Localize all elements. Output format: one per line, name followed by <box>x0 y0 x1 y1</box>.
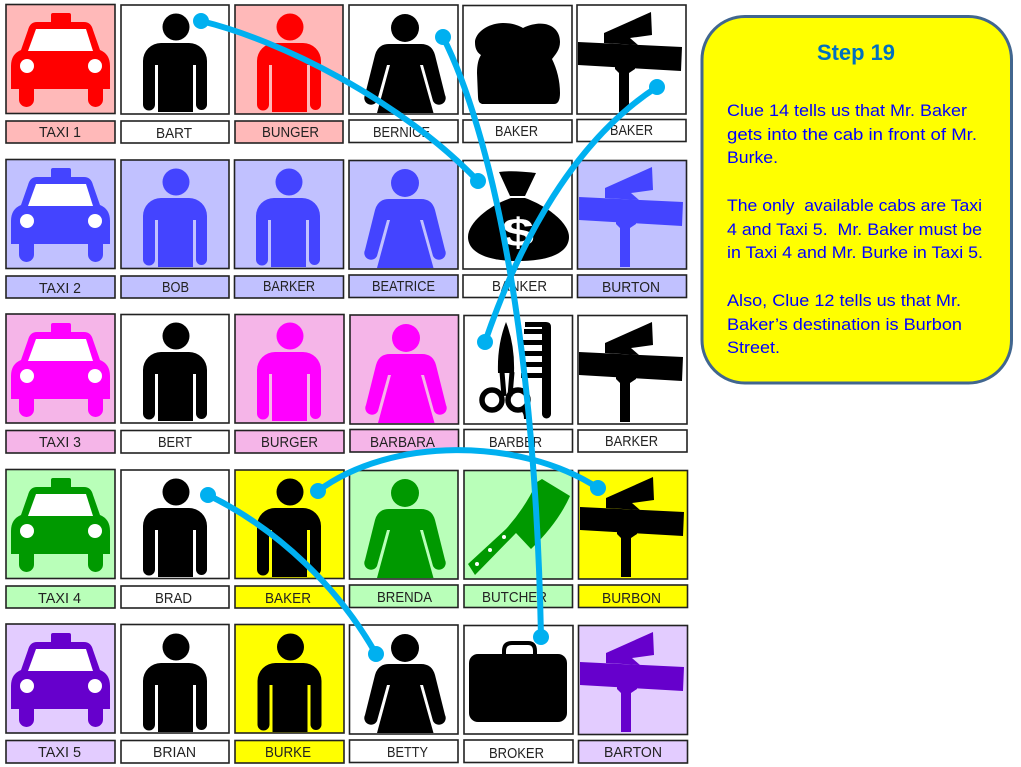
label: BURBON: BURBON <box>602 590 661 607</box>
heading: Step 19 <box>817 40 895 65</box>
text block: clue 14: Burke. <box>727 149 778 167</box>
label: TAXI 2 <box>6 276 115 298</box>
icon: Barbara <box>350 315 458 424</box>
row 4: Taxi 4 icon <box>6 470 115 578</box>
connector: Bart to banker <box>193 13 486 189</box>
label: BAKER <box>463 120 572 142</box>
connector lines <box>193 13 665 662</box>
connector: Baker passenger to Burbon street <box>310 450 606 499</box>
label: BUTCHER: BUTCHER <box>482 589 547 606</box>
label: BRAD: BRAD <box>155 590 192 607</box>
label: BARBARA: BARBARA <box>370 434 435 451</box>
icon: Brad <box>121 470 229 578</box>
label: BART <box>121 121 229 143</box>
label: BAKER passenger: BAKER <box>265 590 311 607</box>
label: BURGER: BURGER <box>261 434 318 451</box>
label: TAXI 1: TAXI 1 <box>39 124 81 141</box>
label: TAXI 3 <box>6 430 115 453</box>
label: BEATRICE: BEATRICE <box>372 278 435 295</box>
text block: clue 12: Baker’s destination is Burbon <box>727 316 962 334</box>
icon: butcher cleaver <box>464 470 572 579</box>
panel: step explanation <box>702 16 1012 383</box>
label: BEATRICE <box>349 275 458 298</box>
label: BAKER: BAKER <box>495 123 538 140</box>
label: BOB: BOB <box>162 279 189 296</box>
label: BERT: BERT <box>158 434 192 451</box>
label: BURGER <box>235 430 344 453</box>
label: BAKER street <box>577 120 686 142</box>
icon: Burton street sign <box>578 160 686 269</box>
icon: Barker street sign <box>578 316 687 424</box>
label: BUNGER: BUNGER <box>262 124 319 141</box>
label: BETTY: BETTY <box>387 744 428 761</box>
label: BERNICE <box>349 120 458 142</box>
label: BERNICE: BERNICE <box>373 124 430 141</box>
label: BOB <box>121 276 229 298</box>
label: BURTON <box>578 275 686 298</box>
icon: Bernice <box>349 5 458 114</box>
icon: Baker passenger <box>235 470 344 578</box>
row 3: Taxi 3 icon <box>6 314 115 423</box>
icon: Beatrice <box>349 160 458 269</box>
label: BARTON <box>578 740 688 763</box>
icon: Brenda <box>350 470 458 579</box>
label: BUNGER <box>235 121 343 143</box>
text block: clue 12: Street. <box>727 339 780 357</box>
icon: Barker <box>234 160 344 268</box>
text block: clue 12: Also, Clue 12 tells us that Mr. <box>727 292 961 310</box>
label: TAXI 1 <box>6 121 115 143</box>
label: BRENDA <box>350 585 458 608</box>
label: TAXI 5: TAXI 5 <box>38 744 81 761</box>
label: BURKE <box>235 740 344 763</box>
label: BRAD <box>121 586 229 608</box>
label: BROKER: BROKER <box>489 745 544 762</box>
label: BRENDA: BRENDA <box>377 589 432 606</box>
label: BERT <box>121 430 229 453</box>
label: BANKER: BANKER <box>492 278 547 295</box>
label: TAXI 4: TAXI 4 <box>38 590 81 607</box>
icon: banker money bag: $ <box>502 211 534 255</box>
icon: Bob <box>121 160 229 268</box>
label: BRIAN: BRIAN <box>153 744 196 761</box>
icon: Bert <box>121 314 229 423</box>
label: TAXI 2: TAXI 2 <box>39 280 81 297</box>
text block: clue 14: gets into the cab in front of Mr. <box>727 126 977 144</box>
label: BAKER passenger <box>235 586 344 608</box>
text block: available cabs: in Taxi 4 and Mr. Burke in Taxi 5. <box>727 244 983 262</box>
label: BUTCHER <box>464 585 572 608</box>
row 5: Taxi 5 icon <box>6 624 115 733</box>
icon: Bunger <box>235 5 343 114</box>
label: BURBON <box>578 585 688 608</box>
icon: broker briefcase <box>464 626 573 734</box>
row 1: Taxi 1 icon <box>6 4 115 114</box>
label: TAXI 5 <box>6 740 115 763</box>
label: BURTON: BURTON <box>602 279 660 296</box>
label: BROKER <box>464 740 573 762</box>
icon: Burger <box>235 314 344 423</box>
label: BANKER <box>463 275 572 298</box>
icon: barber scissors and comb <box>464 316 572 424</box>
label: BART: BART <box>156 125 192 142</box>
icon: Burke <box>235 624 344 733</box>
text block: clue 14: Clue 14 tells us that Mr. Baker <box>727 102 968 120</box>
label: BARBER <box>464 430 572 452</box>
icon: Betty <box>350 625 458 734</box>
label: TAXI 4 <box>6 586 115 608</box>
text block: available cabs: 4 and Taxi 5. Mr. Baker must be <box>727 221 982 239</box>
label: BARKER <box>234 276 344 298</box>
puzzle grid <box>6 4 688 763</box>
icon: Brian <box>121 624 229 733</box>
label: BARKER: BARKER <box>263 278 315 295</box>
label: BURKE: BURKE <box>265 744 311 761</box>
text block: clue 14 <box>727 102 977 167</box>
icon: Bart <box>121 5 229 114</box>
icon: banker money bag <box>463 160 572 269</box>
label: BAKER street: BAKER <box>610 122 653 139</box>
icon: baker bread <box>463 6 572 114</box>
text block: available cabs <box>727 197 983 262</box>
label: BARBARA <box>350 430 458 452</box>
icon: Barton street sign <box>578 626 688 734</box>
text block: available cabs: The only available cabs are Taxi <box>727 197 982 215</box>
label: BARKER street <box>578 430 687 452</box>
icon: Burbon street sign <box>578 470 688 579</box>
label: BARKER street: BARKER <box>605 433 658 450</box>
text block: clue 12 <box>727 292 962 357</box>
label: TAXI 3: TAXI 3 <box>39 434 81 451</box>
label: BARBER: BARBER <box>489 434 542 451</box>
label: BETTY <box>350 740 458 762</box>
connector: Brad to Betty <box>200 487 384 662</box>
label: BRIAN <box>121 740 229 763</box>
icon: Baker street sign <box>577 5 686 114</box>
connector: Baker street to barber <box>477 79 665 350</box>
connector: Bernice to broker <box>435 29 549 645</box>
label: BARTON: BARTON <box>604 744 662 761</box>
row 2: Taxi 2 icon <box>6 160 115 268</box>
